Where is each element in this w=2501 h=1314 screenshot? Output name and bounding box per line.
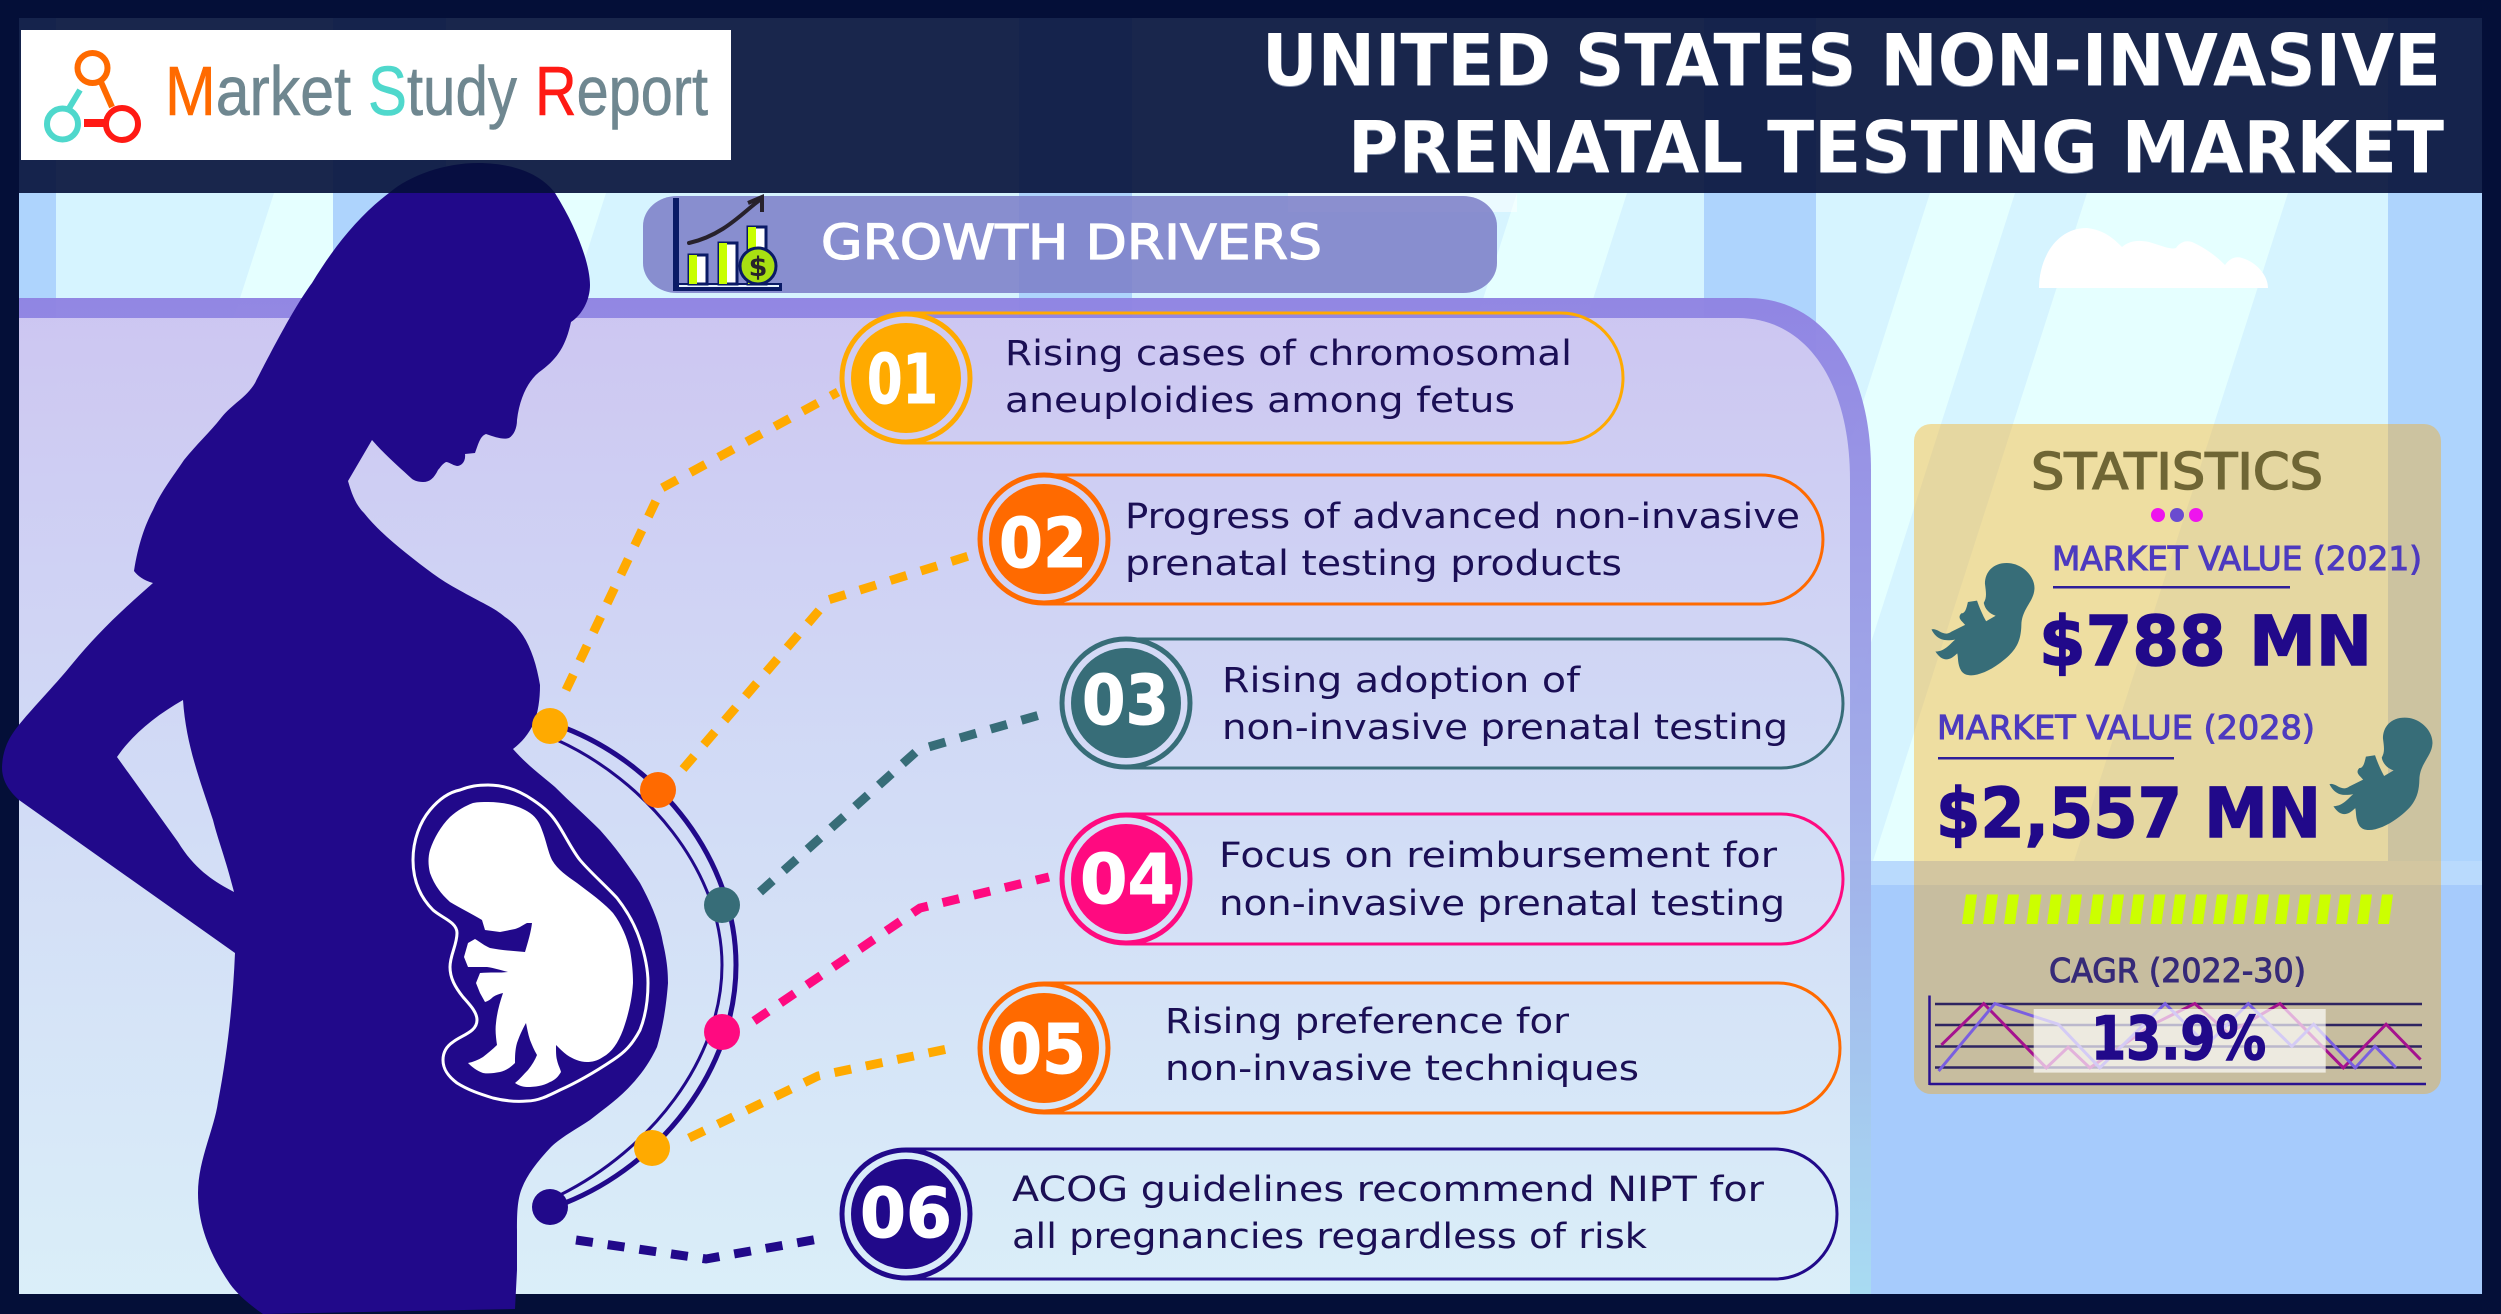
driver 05: non-invasive techniques [1165, 1049, 1639, 1089]
market value 2021: $788 MN [2039, 602, 2372, 682]
driver 01 [842, 313, 1623, 443]
logo: Report [535, 52, 708, 130]
driver 05: 05 [998, 1010, 1086, 1090]
amniotic sac outline [413, 785, 648, 1101]
pregnant woman silhouette [2, 163, 668, 1314]
icon: fetus teal 2028 [2329, 718, 2432, 830]
icon: growth chart with coin [673, 197, 782, 291]
icon: logo nodes [47, 53, 138, 140]
lime stripes divider [1962, 894, 2393, 924]
driver 03: non-invasive prenatal testing [1222, 708, 1788, 748]
logo [21, 30, 731, 160]
cagr value: 13.9% [2091, 1004, 2266, 1074]
driver 05: Rising preference for [1165, 1002, 1570, 1042]
title: UNITED STATES NON-INVASIVE [1262, 19, 2441, 102]
header band [19, 18, 2482, 193]
driver 02: prenatal testing products [1125, 544, 1622, 584]
driver 06 [842, 1149, 1837, 1279]
panel: growth drivers background [19, 298, 1871, 1294]
cagr line chart [1930, 996, 2426, 1085]
driver 02 [980, 475, 1823, 604]
market value 2028: MARKET VALUE (2028) [1937, 708, 2315, 747]
heading text: GROWTH DRIVERS [821, 215, 1322, 271]
driver 01: aneuploidies among fetus [1005, 381, 1515, 421]
cagr label: CAGR (2022-30) [2049, 951, 2306, 990]
three dots [2151, 508, 2203, 522]
driver 03 [1062, 639, 1843, 768]
logo: Study [368, 52, 517, 130]
driver 04: non-invasive prenatal testing [1219, 884, 1785, 924]
driver 02: Progress of advanced non-invasive [1125, 497, 1800, 537]
driver 03: Rising adoption of [1222, 661, 1581, 701]
growth drivers heading pill [643, 193, 1517, 293]
market value 2021 [2039, 539, 2422, 682]
market value 2028 [1936, 708, 2321, 854]
driver 06: all pregnancies regardless of risk [1012, 1217, 1648, 1257]
title [1262, 19, 2445, 189]
cloud [2039, 228, 2268, 288]
market value 2028: $2,557 MN [1936, 774, 2321, 854]
driver 01: Rising cases of chromosomal [1005, 334, 1572, 374]
driver 04: 04 [1080, 840, 1175, 920]
arc connecting the dots [557, 728, 736, 1203]
icon: fetus teal 2021 [1931, 563, 2034, 675]
panel: statistics card [1914, 424, 2441, 1094]
driver 05 [980, 983, 1840, 1113]
fetus [428, 802, 633, 1087]
dashed connectors [566, 392, 1050, 1259]
driver 01: 01 [867, 340, 938, 420]
driver 03: 03 [1082, 661, 1169, 741]
driver 06: ACOG guidelines recommend NIPT for [1012, 1170, 1765, 1210]
driver 06: 06 [860, 1174, 952, 1254]
statistics heading: STATISTICS [2031, 443, 2323, 501]
driver 02: 02 [999, 504, 1087, 584]
driver 04 [1062, 814, 1843, 944]
market value 2021: MARKET VALUE (2021) [2052, 539, 2422, 578]
logo text: Market [165, 52, 351, 130]
connector dots [532, 708, 740, 1225]
title: PRENATAL TESTING MARKET [1348, 106, 2445, 189]
driver 04: Focus on reimbursement for [1219, 836, 1778, 876]
icon: growth chart with coin: $ [749, 252, 767, 283]
